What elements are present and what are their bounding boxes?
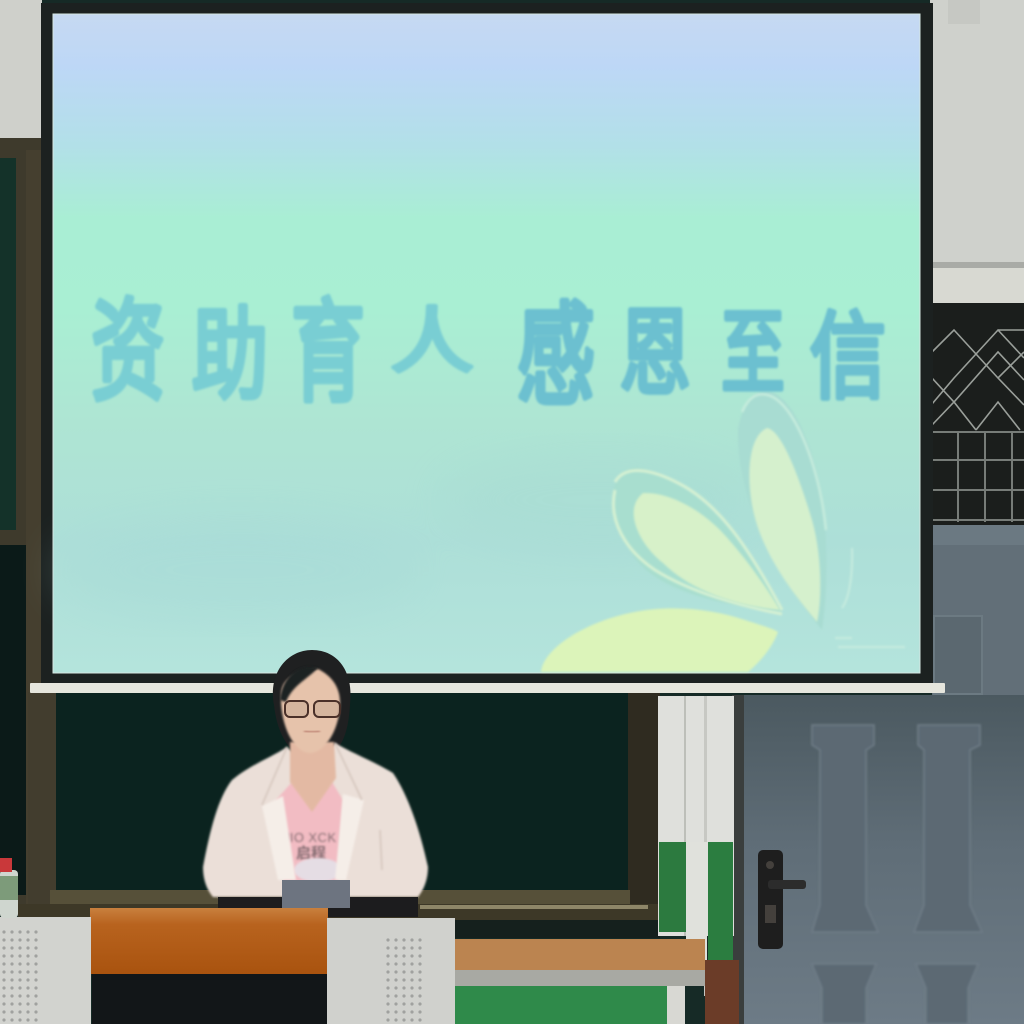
fringe bbox=[280, 667, 318, 702]
slide title: 恩 bbox=[619, 300, 691, 406]
slide title: 人 bbox=[390, 301, 474, 382]
slide title: 感 bbox=[517, 295, 595, 418]
side desk bbox=[455, 939, 739, 1024]
lectern bbox=[0, 908, 455, 1024]
jacket bbox=[203, 743, 428, 897]
bottom petal bbox=[541, 608, 778, 672]
slide title: 育 bbox=[291, 291, 365, 415]
desk items bbox=[218, 880, 418, 917]
hair bbox=[273, 650, 351, 748]
flower petals bbox=[541, 391, 905, 672]
slide title: 资 bbox=[91, 290, 165, 414]
screen bottom bar bbox=[30, 683, 945, 693]
face bbox=[281, 669, 340, 753]
blackboard bbox=[18, 692, 660, 938]
wall pillar bbox=[658, 696, 734, 996]
glasses bbox=[285, 701, 340, 717]
left petal bbox=[613, 468, 782, 612]
presenter bbox=[203, 650, 428, 897]
screen frame bbox=[41, 3, 933, 684]
slide title: 助 bbox=[192, 300, 268, 411]
left blackboard edge bbox=[0, 138, 44, 908]
pink shirt bbox=[276, 782, 343, 884]
screen haze bbox=[60, 450, 760, 620]
door bbox=[732, 525, 1024, 1024]
upright petal bbox=[738, 391, 826, 630]
presenter: 启程 bbox=[296, 845, 326, 862]
projection screen bbox=[30, 3, 945, 693]
slide title: 至 bbox=[721, 301, 785, 405]
water bottle bbox=[0, 858, 18, 918]
neck bbox=[290, 742, 336, 812]
slide title bbox=[91, 290, 886, 418]
lapels bbox=[262, 794, 364, 880]
screen surface bbox=[53, 14, 920, 673]
window with lattice bbox=[932, 303, 1024, 525]
slide title: 信 bbox=[810, 305, 886, 411]
shirt print: UIO XCK bbox=[280, 830, 336, 845]
